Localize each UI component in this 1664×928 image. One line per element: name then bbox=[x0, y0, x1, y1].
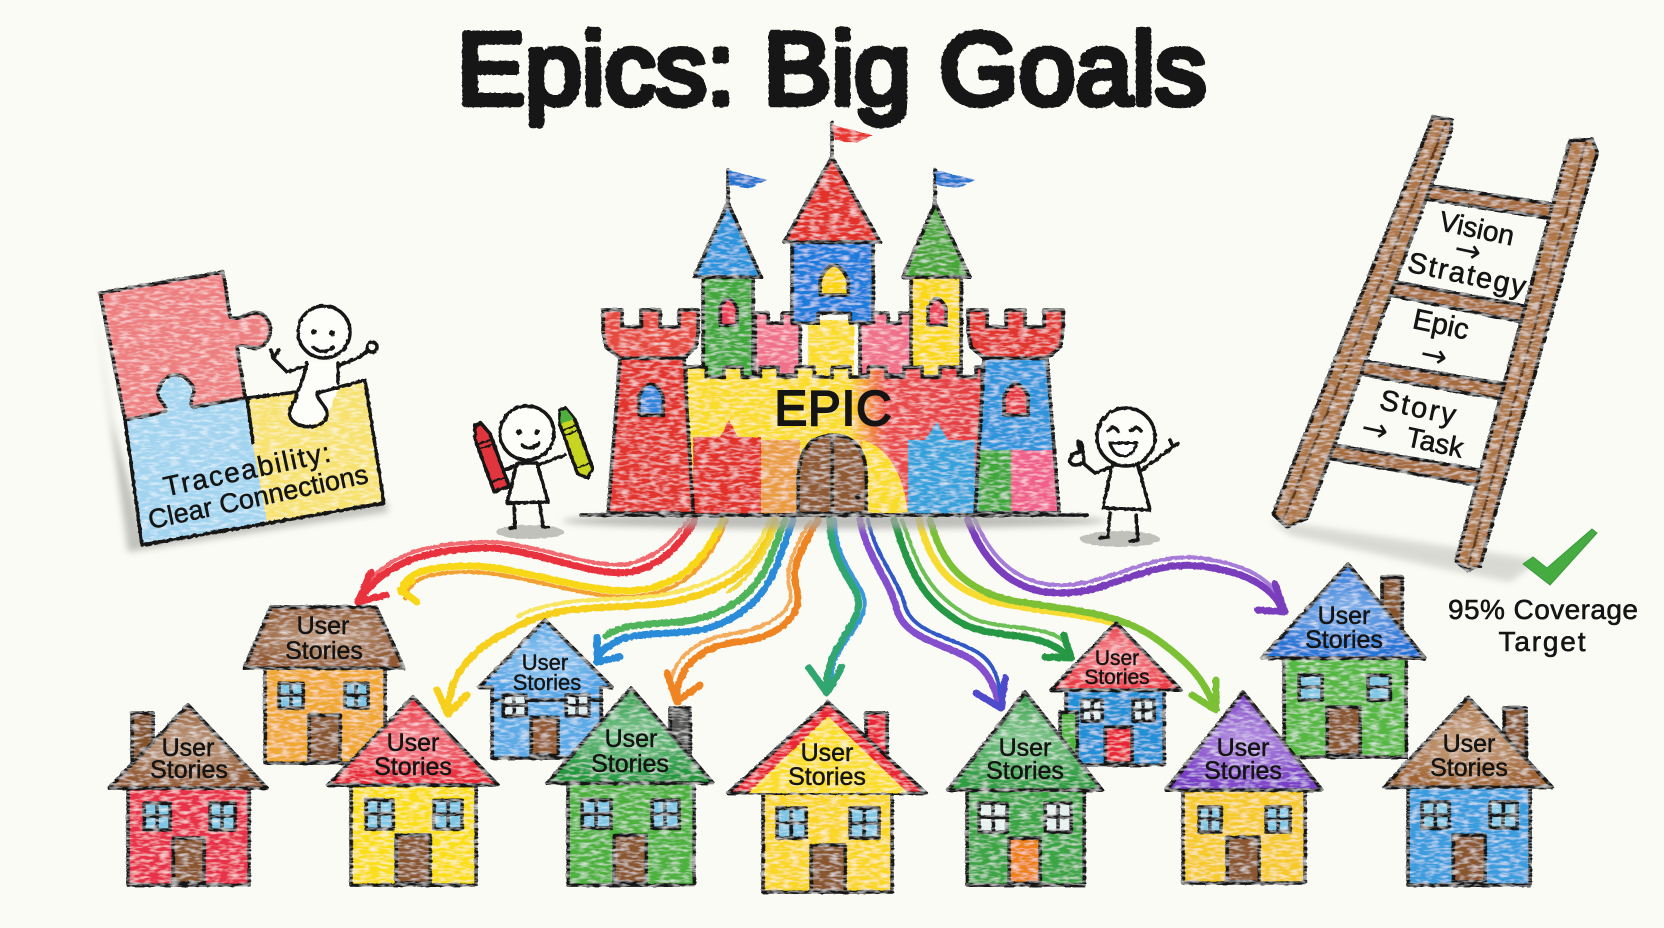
coverage target callout bbox=[1448, 594, 1638, 657]
body bbox=[128, 788, 249, 885]
label: User bbox=[801, 739, 853, 767]
back wall bbox=[755, 313, 911, 375]
puzzle piece: yellow bbox=[247, 380, 384, 522]
windows bbox=[777, 808, 879, 838]
body bbox=[265, 668, 385, 763]
house: blue body with red roof bbox=[1051, 623, 1181, 765]
chimney bbox=[1504, 708, 1526, 758]
label: Stories bbox=[374, 753, 452, 781]
label: Stories bbox=[1204, 757, 1282, 785]
gatehouse blocks bbox=[693, 420, 761, 513]
door bbox=[531, 717, 558, 755]
windows bbox=[144, 803, 235, 830]
arrow: epic to story: → bbox=[1417, 334, 1451, 376]
roof bbox=[1166, 692, 1322, 790]
door bbox=[614, 835, 646, 883]
house: light blue bbox=[479, 620, 612, 758]
label: User bbox=[297, 612, 349, 640]
roof bbox=[1051, 623, 1181, 690]
door bbox=[396, 835, 430, 883]
stick figure waving bbox=[1070, 408, 1178, 547]
puzzle piece: red bbox=[100, 272, 270, 420]
rung 4 bbox=[1322, 443, 1480, 485]
arrow: story to task: → bbox=[1358, 408, 1392, 450]
label bbox=[1084, 647, 1150, 689]
door bbox=[1327, 707, 1360, 755]
chimney bbox=[670, 708, 690, 758]
chimney bbox=[1382, 577, 1402, 627]
body bbox=[1284, 658, 1406, 757]
front wall bbox=[686, 367, 982, 513]
ladder step: epic bbox=[1410, 303, 1472, 376]
arrow: orange bbox=[667, 520, 818, 702]
label: strategy: Strategy bbox=[1405, 247, 1529, 303]
ladder bbox=[1270, 117, 1597, 582]
right rail bbox=[1456, 139, 1597, 570]
body bbox=[763, 793, 892, 892]
windows bbox=[279, 683, 368, 708]
label: Stories bbox=[150, 756, 228, 784]
ladder step: vision to strategy bbox=[1405, 205, 1529, 303]
label: Stories bbox=[788, 763, 866, 791]
windows bbox=[503, 695, 589, 716]
body bbox=[967, 790, 1084, 885]
house: green with orange door bbox=[948, 692, 1102, 885]
house: red body with brown roof bbox=[109, 705, 267, 885]
icon: green check bbox=[1523, 529, 1597, 585]
label bbox=[986, 734, 1064, 785]
windows bbox=[1299, 675, 1390, 700]
roof bbox=[479, 620, 612, 700]
label bbox=[788, 739, 866, 791]
body bbox=[1066, 690, 1164, 765]
house: green with grey chimney bbox=[547, 688, 713, 885]
house: yellow with red roof bbox=[328, 697, 498, 885]
arrow: dark green bbox=[894, 520, 1071, 658]
label bbox=[150, 734, 228, 784]
label: User bbox=[1217, 734, 1269, 762]
turret: green tower with blue roof bbox=[703, 277, 753, 377]
rung 2 bbox=[1385, 280, 1525, 322]
label bbox=[1430, 730, 1508, 782]
roof bbox=[547, 688, 713, 783]
castle: EPIC bbox=[581, 122, 1087, 515]
coverage value: 95% Coverage bbox=[1448, 594, 1638, 625]
door bbox=[1453, 835, 1485, 882]
ladder step: story to task bbox=[1358, 384, 1467, 464]
coverage caption: Target bbox=[1498, 626, 1586, 657]
arrow: purple bbox=[968, 520, 1285, 612]
door bbox=[798, 435, 866, 513]
label: User bbox=[1095, 647, 1139, 670]
chimney bbox=[132, 713, 153, 763]
label: Stories bbox=[1430, 754, 1508, 782]
label bbox=[1204, 734, 1282, 785]
label: User bbox=[1318, 602, 1370, 630]
puzzle piece: blue bbox=[125, 375, 267, 545]
label: Stories bbox=[591, 750, 669, 778]
arrow: yellow bbox=[437, 520, 775, 714]
body bbox=[492, 680, 601, 758]
roof bbox=[1262, 564, 1425, 658]
door bbox=[173, 838, 204, 883]
roof bbox=[728, 702, 926, 793]
stick figure with crayons bbox=[471, 406, 595, 539]
label: Stories bbox=[513, 670, 581, 695]
label: Stories bbox=[1305, 626, 1383, 654]
label bbox=[374, 729, 452, 781]
label line 1: Traceability: bbox=[161, 437, 333, 502]
label: story: Story bbox=[1377, 384, 1459, 432]
rainbow arrows from castle to houses bbox=[358, 520, 1285, 714]
body bbox=[1183, 790, 1305, 883]
label bbox=[591, 725, 669, 778]
windows bbox=[1422, 802, 1517, 828]
arrow: blue-green bbox=[597, 520, 793, 662]
label: task: Task bbox=[1404, 421, 1467, 464]
puzzle label bbox=[145, 437, 371, 535]
arrow: yellow-orange bbox=[401, 520, 727, 602]
arrow: purple-blue bbox=[860, 520, 1005, 708]
crayon: green bbox=[555, 406, 595, 481]
body bbox=[1408, 787, 1530, 885]
label line 2: Clear Connections bbox=[145, 459, 371, 535]
label: User bbox=[605, 725, 657, 753]
windows bbox=[979, 803, 1071, 832]
body bbox=[568, 783, 694, 885]
rung 3 bbox=[1354, 359, 1504, 399]
windows bbox=[1199, 807, 1290, 832]
title: Epics: Big Goals bbox=[457, 12, 1206, 126]
label bbox=[513, 650, 581, 695]
house: yellow with red-edged roof bbox=[728, 702, 926, 892]
label: User bbox=[999, 734, 1051, 762]
arrow: yellow-green bbox=[919, 520, 1216, 710]
house: orange with brown trapezoid roof bbox=[244, 607, 404, 763]
crayon: red bbox=[471, 421, 509, 492]
label: epic: Epic bbox=[1410, 303, 1472, 346]
door bbox=[1105, 727, 1132, 763]
house: yellow with purple roof bbox=[1166, 692, 1322, 883]
puzzle outline bbox=[125, 380, 384, 545]
house: blue with brown roof bbox=[1384, 697, 1552, 885]
turret: yellow tower with green roof bbox=[911, 277, 961, 377]
arrow: red bbox=[358, 520, 695, 602]
roof bbox=[1384, 697, 1552, 787]
label: Stories bbox=[1084, 666, 1150, 689]
roof bbox=[109, 705, 267, 788]
right tower bbox=[975, 358, 1059, 513]
label: User bbox=[1443, 730, 1495, 758]
body bbox=[351, 785, 476, 885]
windows bbox=[582, 800, 679, 828]
stick figure on puzzle bbox=[125, 306, 384, 545]
arrow: green bbox=[809, 520, 865, 693]
chimney bbox=[1060, 712, 1077, 762]
door bbox=[309, 715, 340, 762]
label: Stories bbox=[285, 637, 363, 665]
label: User bbox=[387, 729, 439, 757]
label: User bbox=[522, 650, 568, 675]
label: User bbox=[162, 734, 214, 762]
label: vision: Vision bbox=[1437, 205, 1517, 252]
left rail bbox=[1273, 117, 1452, 527]
door bbox=[811, 845, 845, 892]
roof bbox=[948, 692, 1102, 790]
label: Stories bbox=[986, 757, 1064, 785]
rung 1 bbox=[1420, 184, 1552, 218]
keep: blue central tower with red roof bbox=[792, 242, 873, 323]
puzzle: traceability bbox=[94, 272, 388, 552]
door bbox=[1009, 838, 1040, 883]
castle label: EPIC bbox=[774, 382, 892, 436]
door bbox=[1227, 837, 1259, 882]
windows bbox=[1082, 700, 1154, 721]
windows bbox=[366, 800, 462, 829]
house: green body with blue roof bbox=[1262, 564, 1425, 757]
arrow: vision to strategy: → bbox=[1451, 229, 1485, 271]
castle shadow bbox=[562, 513, 1106, 529]
left tower bbox=[608, 358, 693, 513]
roof bbox=[328, 697, 498, 785]
label bbox=[285, 612, 363, 665]
chimney bbox=[866, 713, 887, 763]
label bbox=[1305, 602, 1383, 654]
roof bbox=[244, 607, 404, 668]
